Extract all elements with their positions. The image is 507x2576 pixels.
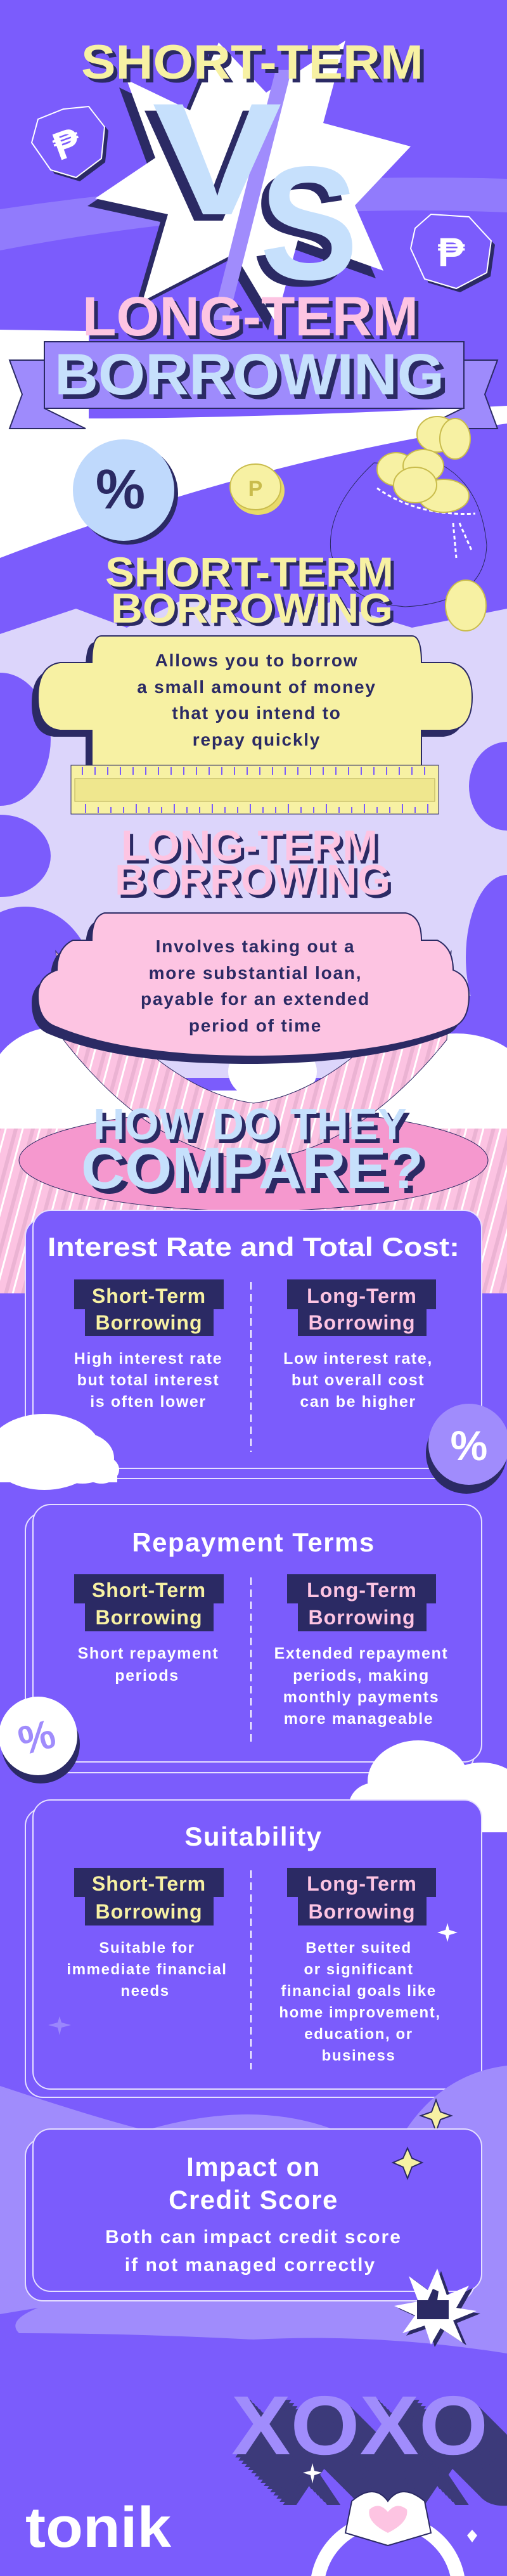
title: VS: S — [260, 133, 358, 314]
text: short-term: is often lower — [90, 1393, 207, 1411]
XOXO: XOXO — [231, 2379, 488, 2472]
callout: long-term description: payable for an extended — [141, 989, 370, 1009]
label: short-term: Short-Term — [92, 1285, 206, 1307]
icon: percent badge — [73, 439, 178, 545]
icon: peso badge left — [32, 107, 108, 181]
panel: impact on credit score: Credit Score — [169, 2185, 338, 2215]
icon: peso badge right: ₱ — [438, 230, 465, 275]
heading: long-term borrowing: LONG-TERM — [121, 822, 378, 870]
panel: impact on credit score: if not managed correctly — [125, 2255, 376, 2275]
label: long-term — [287, 1279, 436, 1336]
title: SHORT-TERM: SHORT-TERM — [81, 36, 423, 89]
text: long-term: or significant — [304, 1961, 414, 1978]
callout: short-term description: that you intend to — [172, 703, 342, 723]
icon: peso badge left: ₱ — [48, 119, 87, 169]
icon: heart hands — [317, 2492, 459, 2576]
text: short-term: Suitable for — [99, 1939, 195, 1957]
icon: ruler — [71, 765, 439, 814]
icon: cloud right — [349, 1740, 507, 1832]
title: VS: V — [143, 77, 273, 255]
title banner: BORROWING: BORROWING — [55, 342, 444, 407]
panel: impact on credit score — [25, 2129, 482, 2301]
icon: cloud left — [0, 1414, 119, 1490]
text: short-term: High interest rate — [74, 1350, 222, 1368]
heading: how do they compare — [81, 1099, 428, 1206]
XOXO: XOXO — [263, 2411, 507, 2504]
text: long-term: more manageable — [284, 1710, 433, 1728]
heading: short-term borrowing: BORROWING — [114, 588, 396, 635]
text: long-term — [283, 1350, 433, 1411]
text: long-term: periods, making — [293, 1667, 430, 1685]
callout: short-term description — [32, 636, 472, 772]
text: long-term — [274, 1645, 448, 1728]
title: SHORT-TERM: SHORT-TERM — [85, 39, 427, 93]
heading: long-term borrowing: BORROWING — [118, 859, 394, 907]
panel: suitability — [25, 1800, 482, 2097]
heading: short-term borrowing: SHORT-TERM — [108, 552, 397, 599]
icon: sparkle yellow — [393, 2148, 422, 2178]
title: VS: V — [152, 70, 282, 249]
icon: coin — [230, 464, 285, 515]
icon: money bag with coins — [330, 417, 487, 631]
XOXO: XOXO — [250, 2398, 507, 2491]
XOXO: XOXO — [266, 2414, 507, 2507]
heading: long-term borrowing: BORROWING — [115, 856, 390, 904]
XOXO: XOXO — [254, 2401, 507, 2494]
text: long-term — [279, 1939, 441, 2064]
text: long-term: Better suited — [305, 1939, 412, 1957]
icon: percent badge right: % — [451, 1422, 487, 1469]
panel title: Interest Rate and Total Cost: — [48, 1232, 459, 1262]
background: clouds behind bowl — [0, 1027, 507, 1154]
text: short-term — [78, 1645, 219, 1685]
icon: sparkle bottom right — [467, 2530, 477, 2542]
callout: long-term description — [32, 913, 469, 1064]
icon: peso badge right — [411, 214, 495, 292]
XOXO: XOXO — [269, 2417, 507, 2510]
text: long-term: monthly payments — [283, 1688, 439, 1706]
panel: repayment terms — [25, 1505, 482, 1773]
background: lower light wave — [0, 2066, 507, 2353]
icon: thumbs up starburst — [394, 2269, 480, 2347]
label: short-term — [74, 1574, 224, 1631]
text: short-term: needs — [120, 1983, 170, 2000]
heading: how do they compare: COMPARE? — [86, 1141, 428, 1206]
heading: how do they compare: COMPARE? — [81, 1136, 423, 1201]
heading: long-term borrowing: LONG-TERM — [124, 825, 381, 873]
label: long-term: Long-Term — [307, 1872, 417, 1895]
text: long-term: Low interest rate, — [283, 1350, 433, 1368]
logo: tonik: tonik — [25, 2496, 172, 2560]
icon: coin: P — [248, 477, 262, 501]
label: short-term: Short-Term — [92, 1872, 206, 1895]
icon: white percent badge left: % — [13, 1711, 60, 1764]
title: LONG-TERM: LONG-TERM — [82, 286, 418, 347]
title banner: BORROWING: BORROWING — [59, 347, 449, 411]
XOXO: XOXO — [241, 2388, 497, 2482]
label: short-term: Borrowing — [96, 1606, 202, 1629]
label: long-term: Borrowing — [309, 1900, 415, 1923]
callout: short-term description: Allows you to borrow — [155, 650, 358, 670]
XOXO: XOXO — [244, 2392, 501, 2485]
star burst behind VS — [87, 41, 411, 330]
icon: percent badge: % — [96, 458, 145, 521]
background: white swoosh — [0, 330, 507, 558]
XOXO: XOXO — [234, 2382, 491, 2475]
background: light wave band — [0, 178, 507, 250]
title banner: BORROWING — [10, 342, 497, 429]
heading: how do they compare: HOW DO THEY — [97, 1103, 411, 1153]
XOXO: XOXO — [247, 2395, 504, 2488]
heading: short-term borrowing: SHORT-TERM — [105, 548, 394, 595]
text: long-term: but overall cost — [292, 1371, 425, 1389]
text: long-term: business — [322, 2047, 395, 2064]
label: short-term — [74, 1279, 224, 1336]
text: long-term: Extended repayment — [274, 1645, 448, 1662]
label: long-term — [287, 1574, 436, 1631]
title: VS — [143, 70, 358, 320]
heading: short-term borrowing: BORROWING — [111, 585, 393, 631]
text: short-term: Short repayment — [78, 1645, 219, 1662]
label: short-term: Borrowing — [96, 1311, 202, 1334]
title: VS: S — [252, 139, 350, 320]
label: long-term: Borrowing — [309, 1606, 415, 1629]
text: long-term: financial goals like — [281, 1983, 437, 2000]
text: short-term: immediate financial — [67, 1961, 228, 1978]
callout: long-term description: period of time — [189, 1016, 322, 1035]
panel title: Impact on — [186, 2152, 321, 2182]
XOXO: XOXO — [257, 2404, 507, 2497]
heading: how do they compare: HOW DO THEY — [93, 1099, 407, 1149]
XOXO — [231, 2379, 507, 2523]
text: short-term — [74, 1350, 222, 1411]
background: lavender middle section — [0, 596, 507, 1084]
icon: percent badge right — [426, 1404, 507, 1494]
text: long-term: education, or — [304, 2026, 413, 2043]
title: LONG-TERM: LONG-TERM — [86, 290, 422, 351]
label: short-term: Borrowing — [96, 1900, 202, 1923]
callout: long-term description: more substantial loan, — [149, 963, 362, 983]
background: pink striped bowl — [0, 951, 507, 1293]
label: long-term: Borrowing — [309, 1311, 415, 1334]
callout: short-term description: a small amount of money — [137, 677, 376, 697]
heading: long-term borrowing — [115, 822, 394, 907]
XOXO: XOXO — [238, 2385, 494, 2478]
panel: interest rate and total cost — [25, 1210, 482, 1479]
panel title: Suitability — [184, 1822, 323, 1851]
label: short-term — [74, 1868, 224, 1926]
label: long-term: Long-Term — [307, 1285, 417, 1307]
heading: short-term borrowing — [105, 548, 397, 635]
label: short-term: Short-Term — [92, 1579, 206, 1602]
text: long-term: home improvement, — [279, 2004, 441, 2021]
text: short-term: but total interest — [77, 1371, 219, 1389]
label: long-term: Long-Term — [307, 1579, 417, 1602]
XOXO: XOXO — [273, 2420, 507, 2513]
sparkles — [437, 1923, 458, 1942]
callout: long-term description: Involves taking out a — [156, 936, 355, 956]
text: long-term: can be higher — [300, 1393, 416, 1411]
icon: small sparkle — [303, 2463, 322, 2483]
text: both: Both can impact credit score — [105, 2227, 402, 2248]
panel title: Repayment Terms — [132, 1527, 375, 1557]
icon: white percent badge left — [0, 1697, 80, 1783]
text: short-term: periods — [115, 1667, 179, 1685]
label: long-term — [287, 1868, 436, 1926]
callout: short-term description: repay quickly — [193, 730, 321, 749]
XOXO: XOXO — [260, 2407, 507, 2501]
icon: sparkle yellow top — [421, 2100, 451, 2132]
text: short-term — [67, 1939, 228, 2000]
